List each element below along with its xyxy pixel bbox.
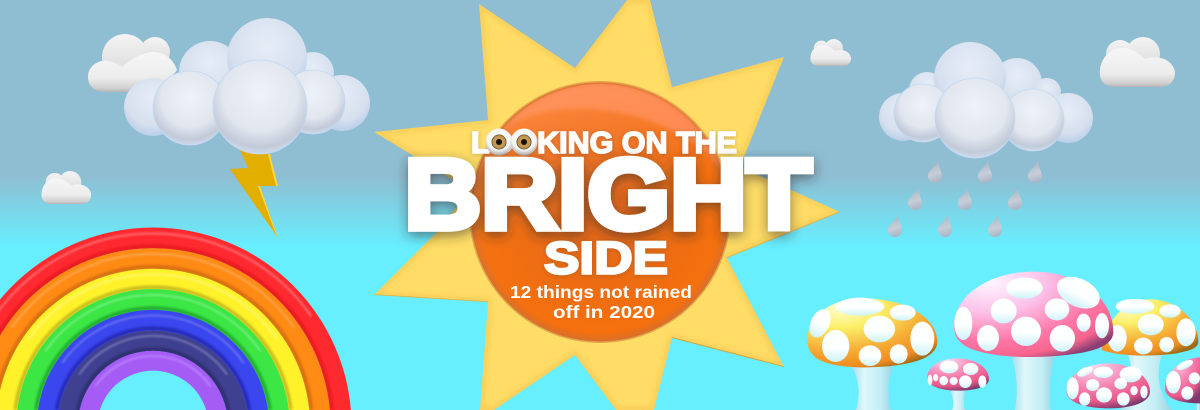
icon: rainbow (0, 228, 351, 410)
icon: lightning bolt (230, 150, 278, 238)
subtitle (510, 282, 692, 322)
title (404, 125, 812, 322)
front puffs (894, 78, 1064, 158)
indigo band (59, 331, 247, 410)
mushroom: pink lower right (1067, 363, 1150, 408)
sun rays (374, 0, 840, 410)
small cloud: lower left (42, 171, 91, 204)
green band (17, 289, 289, 410)
mushroom: large pink (954, 270, 1113, 410)
subtitle: off in 2020 (553, 302, 655, 322)
subtitle: 12 things not rained (510, 282, 692, 302)
mushroom: pink far right (1165, 357, 1200, 410)
icon: rain drops (888, 161, 1042, 237)
back puffs (879, 42, 1093, 143)
yellow band (0, 269, 309, 410)
icon: right eye (510, 128, 538, 156)
purple band (80, 351, 226, 410)
orange disc (469, 81, 731, 343)
heading: bright: BRIGHT (404, 138, 812, 250)
icon: sun (374, 0, 840, 410)
heading: side: SIDE (544, 232, 668, 284)
red band (0, 228, 351, 410)
mushrooms (805, 270, 1200, 410)
icon: storm cloud (124, 18, 370, 154)
small cloud: top centre right (810, 39, 851, 66)
mushroom: orange left (805, 298, 937, 410)
mushroom: orange right (1102, 299, 1198, 410)
icon: left eye (486, 128, 512, 156)
icon: rain cloud (879, 42, 1093, 158)
orange band (0, 248, 330, 410)
front puffs (153, 60, 345, 154)
heading: looking on the: LOOKING ON THE (471, 125, 737, 160)
blue band (38, 310, 268, 410)
mushroom: small pink centre (927, 358, 989, 410)
small cloud: top left (88, 34, 177, 92)
small cloud: top right (1100, 37, 1175, 87)
back puffs (124, 18, 370, 136)
